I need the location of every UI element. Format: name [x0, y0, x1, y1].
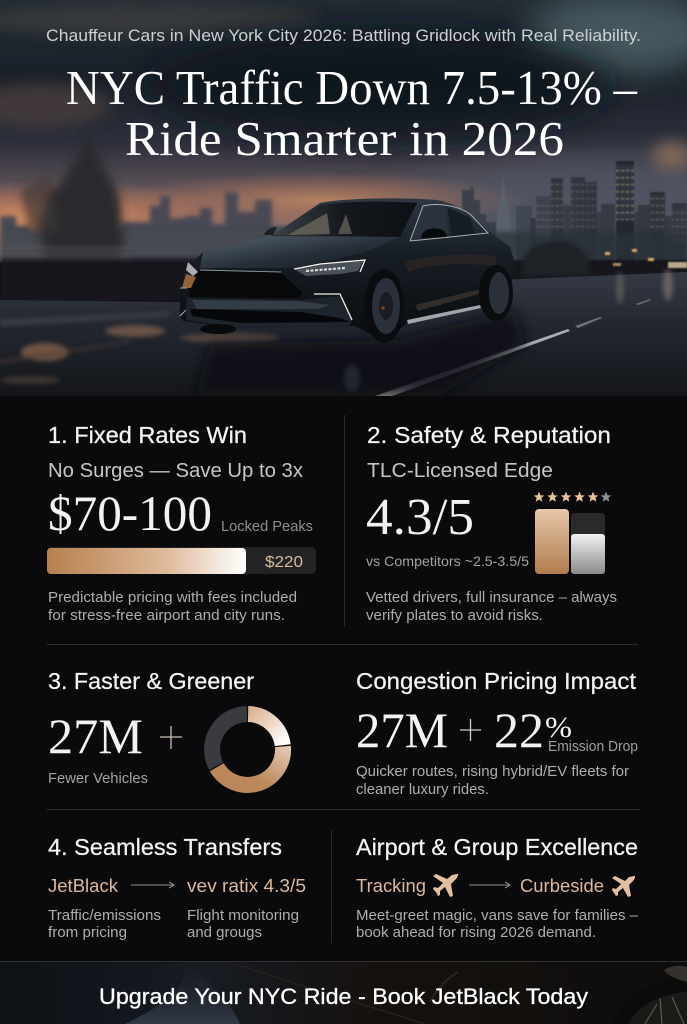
description — [366, 589, 617, 624]
background car — [522, 241, 590, 276]
hero photo: car on wet road with NYC skyline — [0, 0, 687, 396]
arrow — [469, 882, 510, 888]
curbside label: Curbeside — [520, 876, 604, 896]
description: verify plates to avoid risks. — [366, 607, 543, 624]
left description: from pricing — [48, 924, 127, 941]
lane markings — [375, 329, 570, 396]
panel: congestion pricing impact — [356, 668, 638, 798]
description: Meet-greet magic, vans save for families – — [356, 907, 639, 924]
description: for stress-free airport and city runs. — [48, 607, 285, 624]
wet road — [0, 272, 687, 396]
description: cleaner luxury rides. — [356, 781, 489, 798]
bumper — [186, 296, 352, 328]
description: book ahead for rising 2026 demand. — [356, 924, 596, 941]
description — [48, 589, 297, 624]
panel: safety and reputation — [366, 422, 617, 624]
description — [356, 907, 639, 941]
tracking label: Tracking — [356, 876, 426, 896]
JetBlack label: JetBlack — [48, 876, 119, 896]
hood — [200, 236, 400, 268]
panel: fixed rates — [47, 422, 316, 624]
front wheel — [364, 269, 404, 343]
headlight — [294, 260, 364, 276]
panel: faster and greener — [48, 668, 283, 787]
mirror — [421, 228, 446, 238]
chrome window line — [410, 205, 488, 241]
arrow — [131, 882, 174, 888]
price caption: Locked Peaks — [221, 518, 313, 535]
competitor caption: vs Competitors ~2.5-3.5/5 — [366, 553, 529, 569]
icon: plane — [433, 874, 458, 897]
heading: fixed rates: 1. Fixed Rates Win — [48, 422, 247, 448]
subheading: TLC-Licensed Edge — [367, 460, 553, 482]
grille — [188, 270, 303, 298]
blurred tree silhouette — [20, 130, 124, 262]
plus sign — [460, 719, 481, 741]
heading: faster: 3. Faster & Greener — [48, 668, 254, 694]
big number 22%: % — [545, 711, 572, 744]
subheading: No Surges — Save Up to 3x — [48, 460, 303, 482]
call to action text: Upgrade Your NYC Ride - Book JetBlack Today — [99, 984, 588, 1009]
bar chart: rating comparison — [535, 509, 605, 574]
price comparison bar: $220 — [265, 554, 303, 571]
plus sign — [160, 726, 182, 749]
big number 22% — [494, 702, 572, 758]
icon: plane — [612, 876, 635, 897]
right description: Flight monitoring — [187, 907, 299, 924]
description — [356, 763, 629, 798]
emission caption: Emission Drop — [548, 739, 638, 755]
big price: $70-100 — [48, 485, 212, 541]
blurred left skyline — [0, 192, 300, 262]
footer call-to-action banner — [0, 961, 687, 1024]
panel: airport and group excellence — [356, 834, 639, 941]
windshield — [272, 202, 417, 237]
description: Quicker routes, rising hybrid/EV fleets for — [356, 763, 629, 780]
car reflection — [195, 310, 525, 396]
sharp right skyline — [462, 161, 687, 262]
guard rail — [0, 258, 210, 302]
big number 27M: 27M — [356, 702, 448, 758]
right description: and grougs — [187, 924, 262, 941]
big rating: 4.3/5 — [366, 489, 474, 546]
car — [180, 198, 515, 343]
sill chrome — [407, 305, 481, 324]
donut chart — [212, 714, 283, 785]
heading: airport: Airport & Group Excellence — [356, 834, 638, 860]
DRL accent — [314, 294, 352, 320]
wheel — [612, 976, 687, 1024]
lower intake — [190, 309, 350, 323]
title — [66, 60, 637, 166]
description: Vetted drivers, full insurance – always — [366, 589, 617, 606]
title: NYC Traffic Down 7.5-13% – — [66, 60, 637, 115]
rear wheel — [479, 265, 513, 321]
panel: seamless transfers — [48, 834, 306, 941]
side reflections — [405, 255, 497, 272]
big number: 27M — [48, 708, 143, 764]
left description — [48, 907, 161, 941]
heading: safety: 2. Safety & Reputation — [367, 422, 611, 448]
heading: congestion: Congestion Pricing Impact — [356, 668, 637, 694]
side windows — [411, 224, 449, 240]
subtitle: Chauffeur Cars in New York City 2026: Battling Gridlock with Real Reliability. — [46, 27, 641, 45]
price comparison bar — [47, 547, 316, 574]
heading: transfers: 4. Seamless Transfers — [48, 834, 282, 860]
big number 22%: 22 — [494, 702, 544, 758]
left description: Traffic/emissions — [48, 907, 161, 924]
rating label: vev ratix 4.3/5 — [187, 876, 306, 896]
caption: Fewer Vehicles — [48, 771, 148, 787]
icon: star rating — [534, 492, 611, 502]
right description — [187, 907, 299, 941]
description: Predictable pricing with fees included — [48, 589, 297, 606]
title: Ride Smarter in 2026 — [125, 111, 564, 166]
